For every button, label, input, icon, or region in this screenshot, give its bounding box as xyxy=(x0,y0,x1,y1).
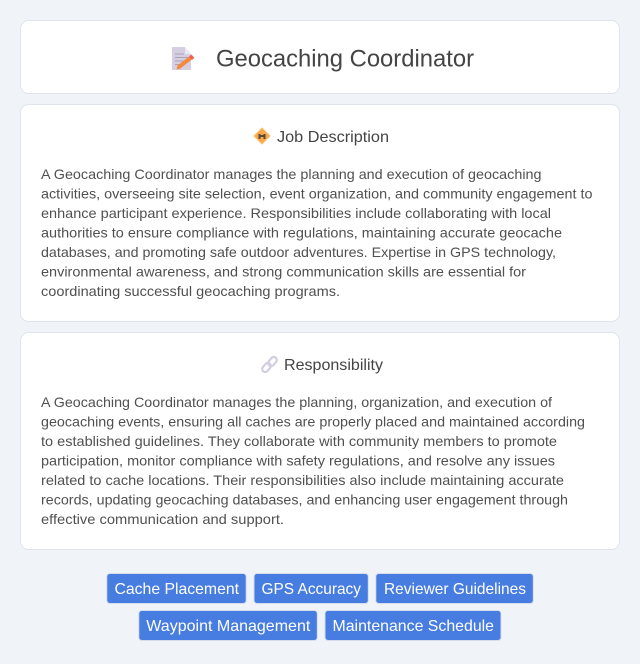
tag: Maintenance Schedule: Maintenance Schedule xyxy=(332,618,494,635)
text block: job description: activities, overseeing site selection, event organization, and community engagement to xyxy=(41,186,593,202)
text block: responsibility xyxy=(41,394,585,527)
panel: responsibility xyxy=(20,332,620,550)
tag: Waypoint Management xyxy=(139,610,317,640)
text block: responsibility: related to cache locations. Their responsibilities also include maintaining accurate xyxy=(41,472,564,488)
tag: Maintenance Schedule xyxy=(325,610,501,640)
tag: Reviewer Guidelines xyxy=(376,574,533,604)
text block: responsibility: participation, monitor compliance with safety regulations, and resolve any issues xyxy=(41,452,555,468)
tag: Cache Placement xyxy=(107,574,246,604)
text block: responsibility: to established guidelines. They collaborate with community members to promote xyxy=(41,433,557,449)
panel: title header xyxy=(20,20,620,94)
icon: chain link xyxy=(261,356,278,373)
text block: job description: enhance participant experience. Responsibilities include collaborating with local xyxy=(41,205,551,221)
text block: responsibility: geocaching events, ensuring all caches are properly placed and maintained according xyxy=(41,414,585,430)
text block: job description: A Geocaching Coordinator manages the planning and execution of geocaching xyxy=(41,166,542,182)
title: Geocaching Coordinator xyxy=(216,46,474,72)
icon: document with pencil xyxy=(172,47,194,70)
tag: Reviewer Guidelines: Reviewer Guidelines xyxy=(384,581,526,598)
tag: GPS Accuracy: GPS Accuracy xyxy=(262,581,361,598)
text block: job description xyxy=(41,166,593,299)
tag: GPS Accuracy xyxy=(254,574,368,604)
heading: job description: Job Description xyxy=(277,129,389,146)
text block: job description: environmental awareness, and strong communication skills are essential for xyxy=(41,264,526,280)
icon: diamond road sign xyxy=(254,128,270,144)
text block: responsibility: A Geocaching Coordinator manages the planning, organization, and execution of xyxy=(41,394,552,410)
heading: responsibility: Responsibility xyxy=(284,357,383,374)
tag: Cache Placement: Cache Placement xyxy=(114,581,240,598)
tag: Waypoint Management: Waypoint Management xyxy=(146,618,311,635)
text block: job description: coordinating successful geocaching programs. xyxy=(41,283,340,299)
panel: job description xyxy=(20,104,620,322)
text block: responsibility: effective communication and support. xyxy=(41,511,284,527)
text block: job description: databases, and promoting safe outdoor adventures. Expertise in GPS technology, xyxy=(41,244,556,260)
text block: job description: authorities to ensure compliance with regulations, maintaining accurate geocache xyxy=(41,224,562,240)
text block: responsibility: records, updating geocaching databases, and enhancing user engagement through xyxy=(41,492,568,508)
